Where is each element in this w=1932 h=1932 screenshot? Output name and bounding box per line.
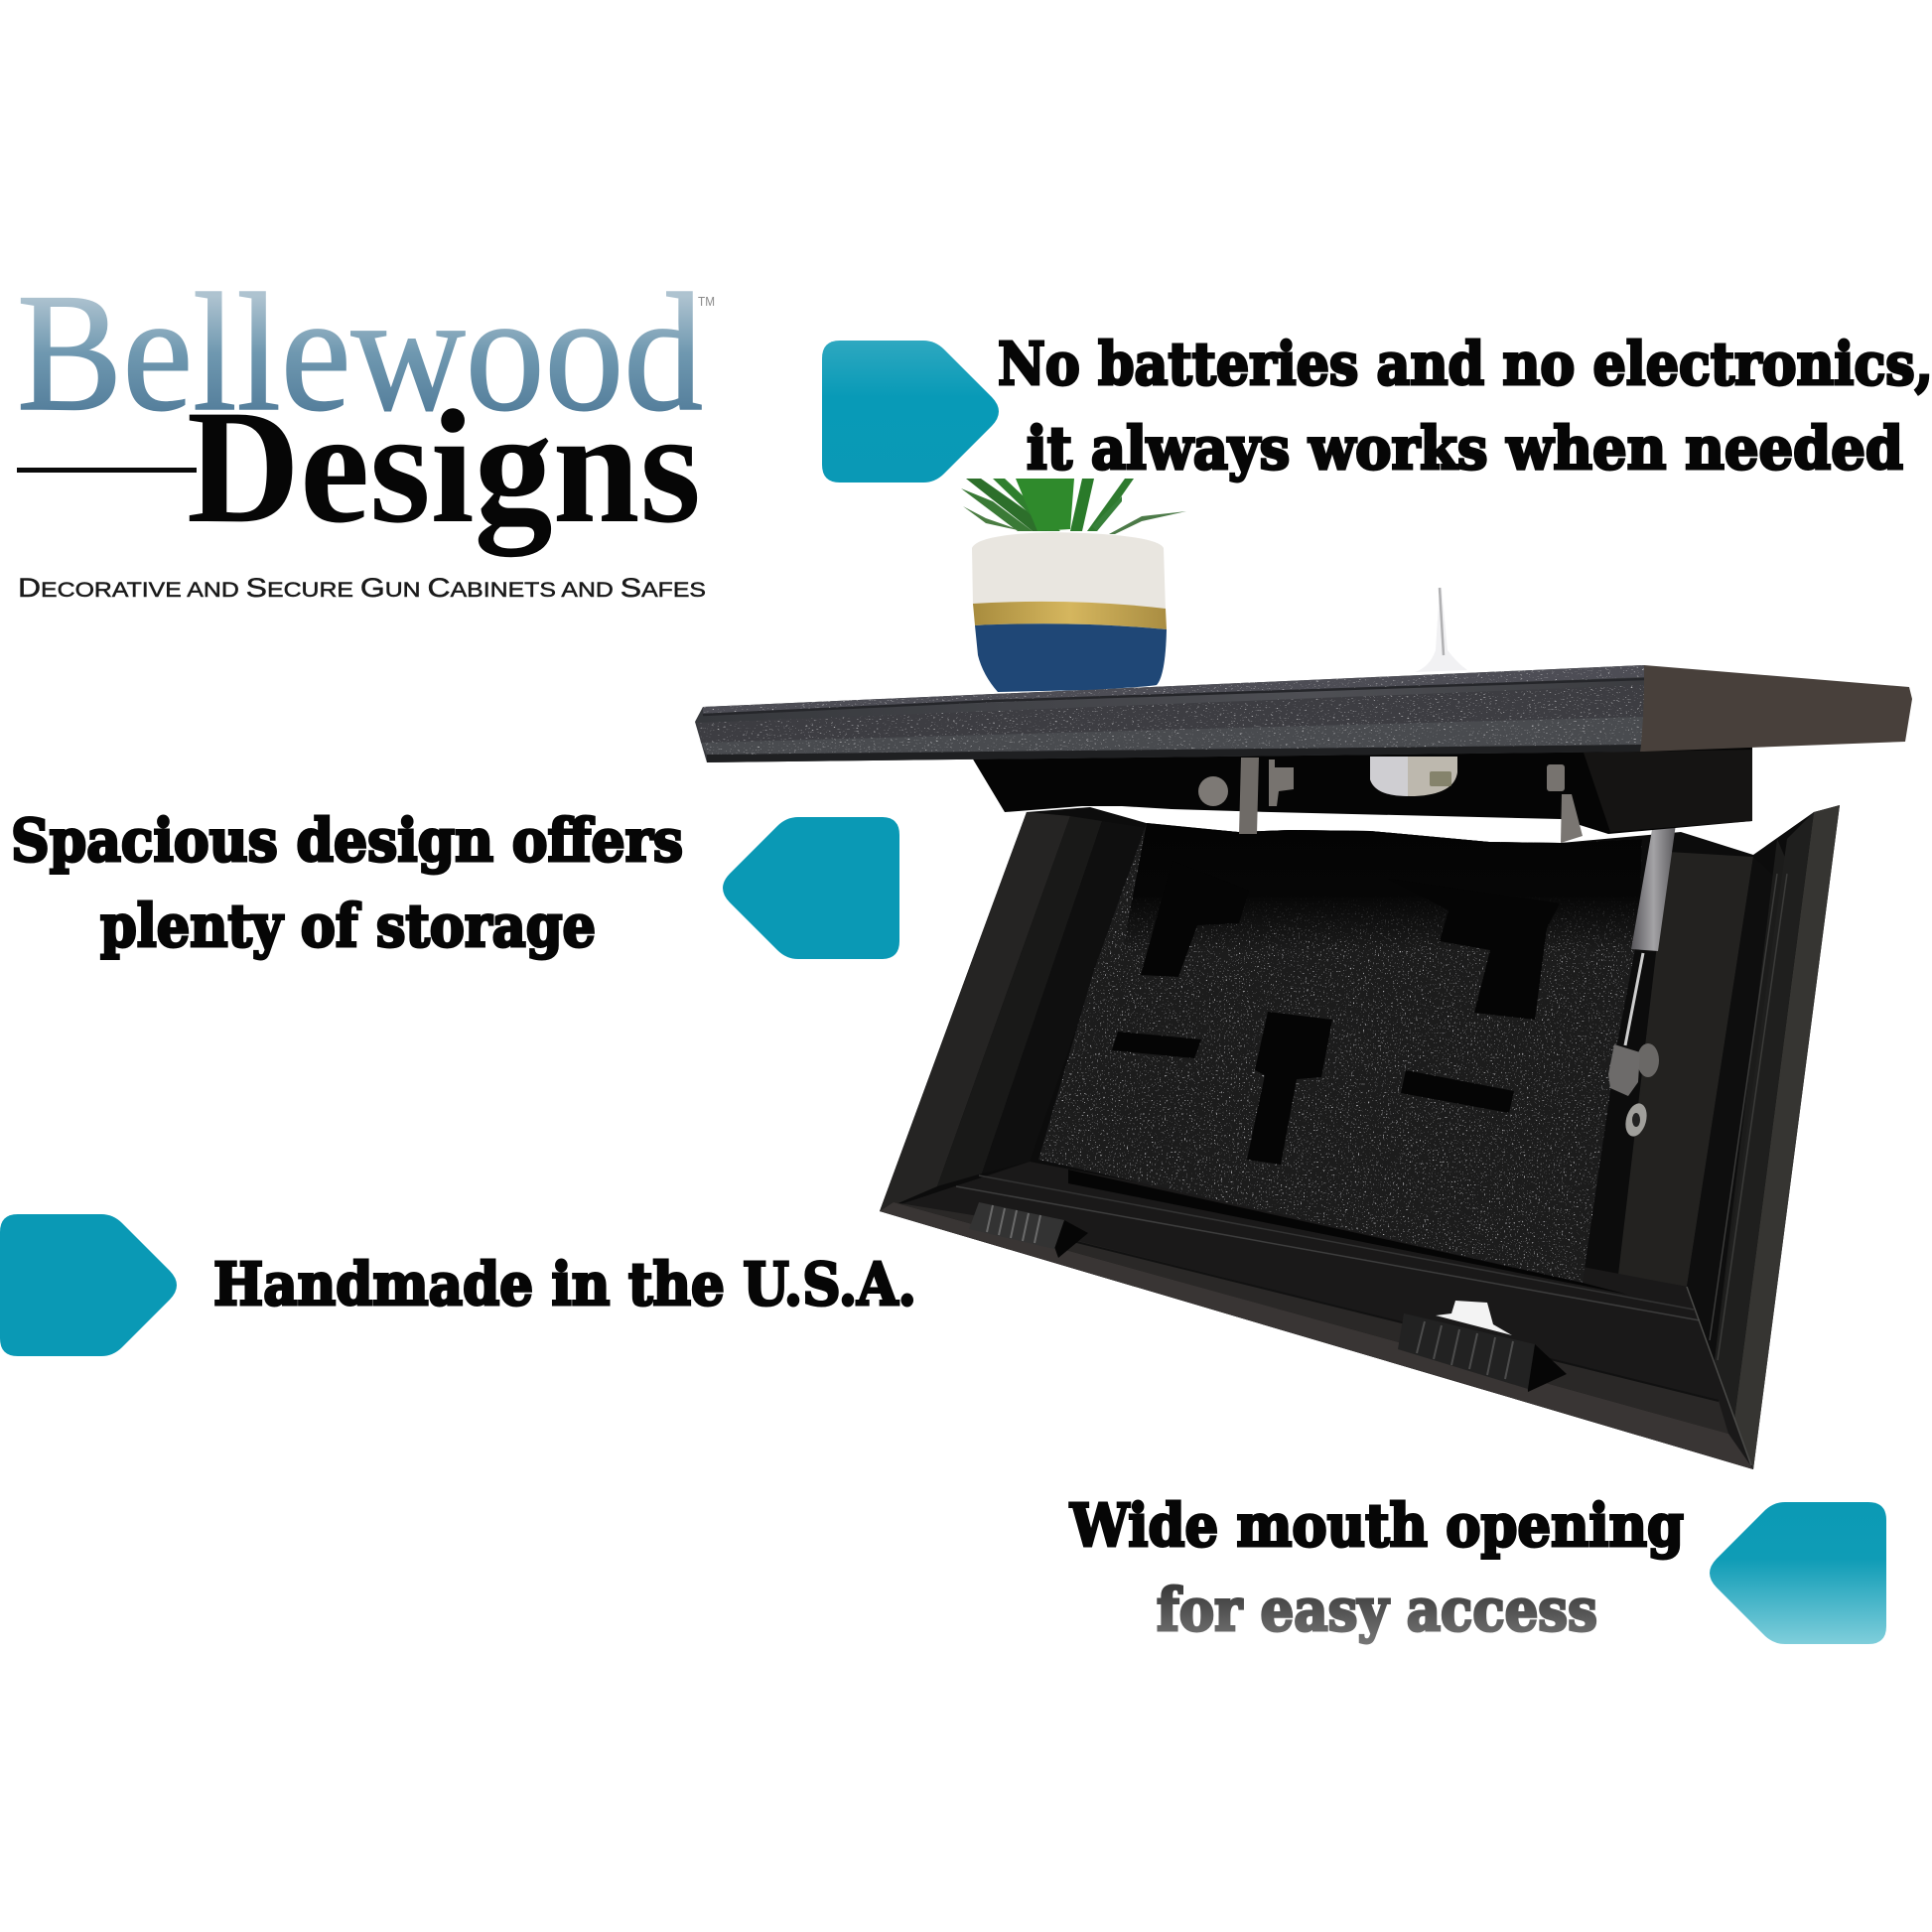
corner seam xyxy=(1687,1287,1751,1465)
text line: wide mouth: Wide mouth opening xyxy=(1069,1491,1684,1560)
logo wordmark: Bellewood: Bellewood xyxy=(17,259,703,446)
left wall xyxy=(880,812,1147,1211)
plug and cord xyxy=(1415,588,1467,672)
pot blue base xyxy=(975,623,1167,692)
right wall xyxy=(1687,805,1840,1469)
bottom wall xyxy=(880,1162,1753,1469)
strut bracket xyxy=(1637,1043,1659,1077)
tag arrow: storage callout xyxy=(723,817,899,959)
plant xyxy=(961,479,1186,534)
text line: plenty of storage: plenty of storage xyxy=(100,892,596,960)
cutout left slot xyxy=(1112,1032,1201,1058)
callout text: wide mouth xyxy=(1069,1491,1684,1644)
left hinge xyxy=(1239,758,1259,834)
cutout center xyxy=(1247,1012,1332,1165)
tag arrow: handmade callout xyxy=(0,1214,177,1356)
shelf lower sheen xyxy=(701,717,1643,755)
logo: Bellewood Designs xyxy=(17,259,715,603)
lock sensor xyxy=(1370,757,1457,796)
text line: easy access: for easy access xyxy=(1157,1576,1597,1644)
cutout top right xyxy=(1388,879,1560,1020)
hinge disc xyxy=(1198,776,1228,806)
callout text: no batteries xyxy=(998,330,1932,483)
cabinet silhouette xyxy=(880,805,1840,1469)
shelf bottom lip xyxy=(707,745,1641,762)
pot white band xyxy=(972,532,1166,611)
shelf mid sheen xyxy=(697,685,1644,743)
logo trademark: TM xyxy=(698,294,715,309)
cutout top left xyxy=(1141,861,1249,977)
shelf side face xyxy=(1638,665,1912,752)
logo rule xyxy=(17,468,197,473)
left latch xyxy=(969,1202,1088,1258)
pot xyxy=(972,532,1167,692)
cabinet body xyxy=(880,805,1840,1469)
right latch xyxy=(1398,1301,1567,1392)
callout text: spacious design xyxy=(11,806,683,960)
logo wordmark: Designs: Designs xyxy=(187,377,701,557)
tag arrow: wide mouth callout xyxy=(1710,1502,1886,1644)
white tab xyxy=(1436,1301,1512,1335)
back panel right xyxy=(1618,852,1753,1287)
callout text: handmade: Handmade in the U.S.A. xyxy=(213,1250,916,1318)
shelf front face xyxy=(695,665,1644,762)
foam top shadow xyxy=(1122,823,1642,953)
shelf groove xyxy=(703,679,1644,715)
foam insert xyxy=(1038,823,1642,1295)
product: shelf gun cabinet xyxy=(695,479,1912,1469)
pot gold band xyxy=(973,602,1167,629)
block under shelf xyxy=(969,745,1752,843)
tag arrow: batteries callout xyxy=(822,341,999,483)
gas strut xyxy=(1608,824,1676,1139)
foam block xyxy=(1038,823,1642,1283)
logo tagline: DECORATIVE AND SECURE GUN CABINETS AND SAFES xyxy=(18,573,706,603)
shelf top molding xyxy=(703,665,1644,714)
cutout right slot xyxy=(1401,1070,1514,1113)
shelf top xyxy=(695,665,1912,762)
foam shadow xyxy=(1068,1170,1628,1295)
text line: spacious design: Spacious design offers xyxy=(11,806,683,875)
right hinge xyxy=(1547,764,1565,791)
